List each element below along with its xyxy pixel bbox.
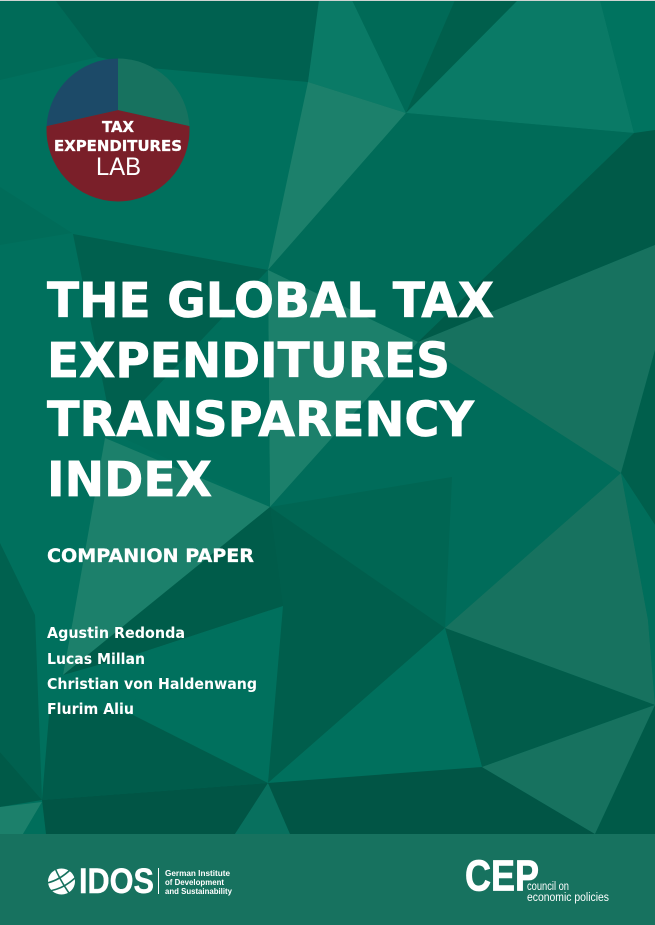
logo: Tax Expenditures Lab: LAB (96, 153, 141, 181)
authors: Christian von Haldenwang (47, 675, 257, 693)
title: TRANSPARENCY (47, 392, 475, 448)
title: EXPENDITURES (47, 333, 450, 389)
title (47, 273, 494, 508)
logo: CEP (465, 852, 609, 904)
logo: IDOS: German Institute (165, 869, 231, 878)
logo: IDOS: and Sustainability (165, 887, 233, 896)
title: THE GLOBAL TAX (47, 273, 494, 329)
logo: IDOS: IDOS (79, 862, 154, 901)
logo: CEP: council on (527, 881, 569, 893)
logo: Tax Expenditures Lab (46, 58, 190, 201)
subtitle: COMPANION PAPER (47, 546, 254, 567)
title: INDEX (47, 452, 212, 508)
logo: IDOS (47, 862, 233, 901)
logo: Tax Expenditures Lab: TAX (102, 118, 134, 136)
authors: Lucas Millan (47, 650, 145, 668)
footer band (0, 834, 655, 925)
logo: Tax Expenditures Lab: EXPENDITURES (54, 137, 182, 155)
authors: Agustin Redonda (47, 624, 185, 642)
icon: IDOS globe (47, 868, 75, 894)
authors (47, 624, 257, 718)
logo: CEP: economic policies (527, 892, 609, 904)
logo: CEP: CEP (465, 852, 539, 900)
authors: Flurim Aliu (47, 700, 134, 718)
logo: IDOS: of Development (165, 878, 224, 887)
